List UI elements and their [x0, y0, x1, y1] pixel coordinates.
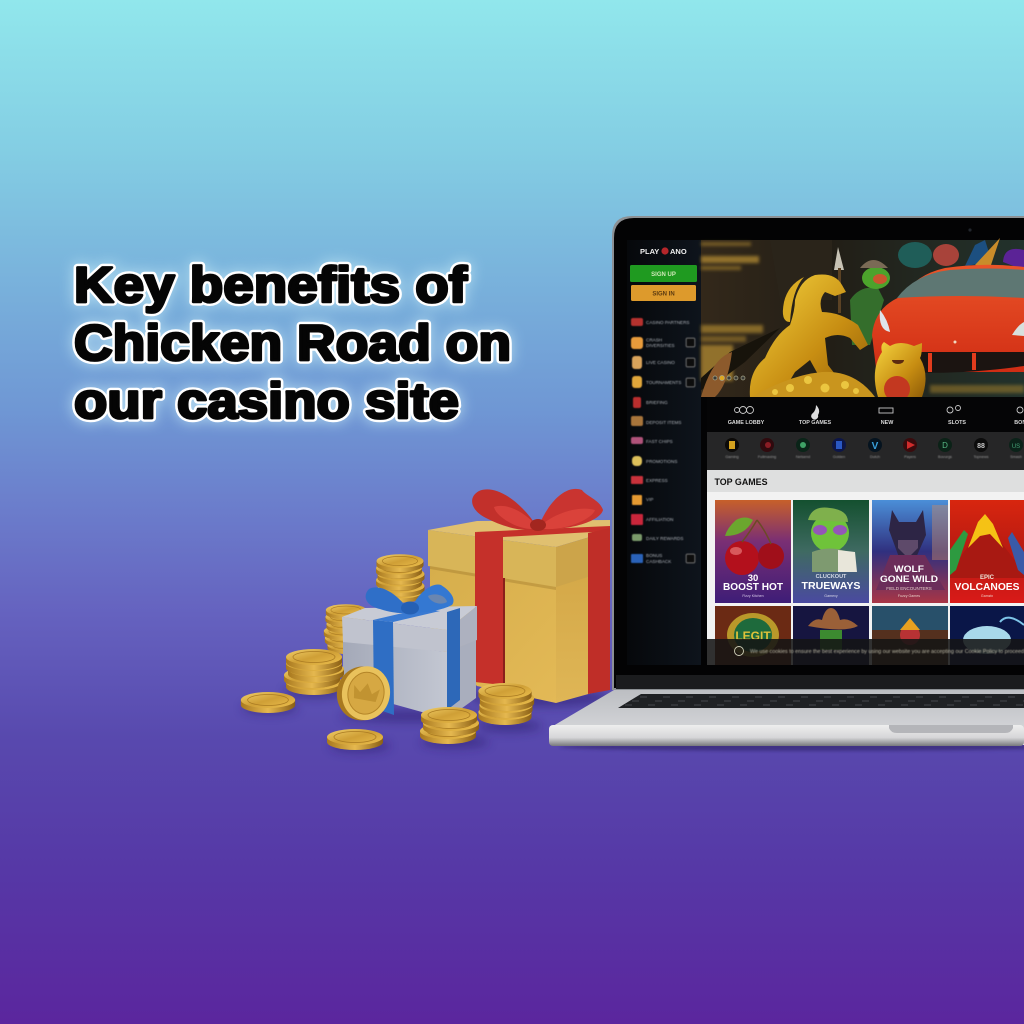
category nav [707, 397, 1024, 432]
game card: Trueways: CLUCKOUT [816, 574, 847, 580]
title: our casino site [74, 373, 459, 429]
trackpad notch [889, 725, 1013, 733]
logo: PLAY [640, 247, 659, 256]
title: Key benefits of [74, 257, 467, 313]
blue ribbon [373, 620, 394, 715]
menu items: CRASH [646, 338, 662, 342]
game card: Boost Hot: BOOST HOT [723, 582, 783, 593]
gold scatter [701, 242, 1024, 393]
blue bow [366, 587, 410, 613]
menu items: DAILY REWARDS [646, 536, 683, 541]
game card: Boost Hot: 30 [748, 573, 758, 584]
game card: Wolf Gone Wild: GONE WILD [880, 574, 938, 585]
category nav: SLOTS [948, 420, 966, 426]
provider icons row: Fullmaxing [758, 455, 776, 459]
coin stack: left [284, 649, 344, 695]
game cards: second row: LEGIT [735, 629, 771, 643]
ground shadows [242, 686, 610, 752]
notice bar: We use cookies to ensure the best experience by using our website you are accepting our Cookie Policy to proceed [750, 649, 1024, 655]
sign up button: SIGN UP [651, 272, 676, 278]
game card: Volcanoes [950, 500, 1024, 603]
menu items: DIVERSITIES [646, 343, 675, 348]
menu items: VIP [646, 497, 653, 502]
title: Chicken Road on [74, 315, 511, 371]
red ribbon [475, 532, 503, 685]
coin stack: front centre [420, 707, 479, 744]
sidebar [627, 240, 701, 665]
provider icons row: D [942, 441, 948, 450]
menu items: CASHBACK [646, 559, 672, 564]
menu items: LIVE CASINO [646, 360, 675, 365]
game cards: second row [715, 606, 1024, 665]
game card: Trueways [793, 500, 869, 603]
notice bar [707, 639, 1024, 665]
provider icons row [707, 432, 1024, 470]
title: Chicken Road on [74, 315, 511, 371]
laptop base [549, 690, 1024, 751]
provider icons row: Topnews [974, 455, 989, 459]
game card: Boost Hot [715, 500, 791, 603]
coin stack: front right [478, 683, 534, 725]
provider icons row: Dutch [870, 455, 880, 459]
coin stack: behind silver box, top [376, 554, 425, 603]
provider icons row: US [1012, 444, 1020, 450]
golden horse [750, 274, 868, 397]
provider icons row: V [872, 441, 879, 452]
title: our casino site [74, 373, 459, 429]
sign up button [630, 265, 697, 282]
upright crown coin [333, 662, 394, 725]
laptop [549, 216, 1024, 751]
menu items: AFFILIATION [646, 517, 673, 522]
carousel dots [713, 376, 745, 380]
menu items: EXPRESS [646, 478, 668, 483]
game card: Wolf Gone Wild: Fuzzy Games [898, 594, 920, 598]
game card: Trueways: Gamevy [824, 594, 838, 598]
provider icons row: Smash [1010, 455, 1022, 459]
provider icons row: Bovurgs [938, 455, 952, 459]
laptop lid [612, 216, 1024, 690]
coin stack: behind silver box, left [324, 604, 367, 654]
category nav: TOP GAMES [799, 420, 831, 426]
game card: Volcanoes: Gamzix [981, 594, 993, 598]
menu items: DEPOSIT ITEMS [646, 420, 681, 425]
game card: Wolf Gone Wild: FIELD ENCOUNTERS [886, 586, 932, 591]
lid [428, 520, 610, 547]
title: our casino site [74, 373, 459, 429]
menu items: PROMOTIONS [646, 459, 677, 464]
title [74, 257, 511, 429]
goblin character [834, 247, 890, 345]
sign in button: SIGN IN [652, 292, 675, 298]
title: Chicken Road on [74, 315, 511, 371]
game card: Boost Hot: Fizzy Kitchen [742, 594, 764, 598]
body [430, 565, 556, 703]
logo [640, 247, 687, 256]
red bow [472, 489, 538, 530]
gold pile [752, 372, 875, 397]
keyboard [618, 694, 1024, 708]
category nav: NEW [881, 420, 894, 426]
category nav: GAME LOBBY [728, 420, 765, 426]
title: Key benefits of [74, 257, 467, 313]
loose coin: front [327, 729, 383, 750]
menu items: FAST CHIPS [646, 439, 673, 444]
hero banner [701, 238, 1024, 402]
logo: ANO [670, 247, 687, 256]
gifts and coins illustration [241, 489, 610, 752]
menu items: TOURNAMENTS [646, 380, 681, 385]
game card: Wolf Gone Wild [872, 500, 948, 603]
provider icons row: Netsend [796, 455, 810, 459]
menu items [631, 318, 695, 564]
gold gift box [428, 489, 610, 703]
loose coin: far left [241, 692, 295, 713]
menu items: BONUS [646, 553, 662, 558]
sign in button [631, 285, 696, 301]
provider icons row: Payers [904, 455, 916, 459]
screen [627, 238, 1024, 665]
silver gift box [342, 585, 477, 719]
game card: Trueways: TRUEWAYS [802, 580, 860, 592]
golden bear [875, 342, 926, 402]
creature backdrop [898, 238, 1024, 270]
top games section: TOP GAMES [714, 477, 768, 488]
red sports car [872, 265, 1024, 374]
provider icons row: Golden [833, 455, 845, 459]
menu items: CASINO PARTNERS [646, 320, 689, 325]
menu items: BRIEFING [646, 400, 668, 405]
title: Key benefits of [74, 257, 467, 313]
provider icons row: Gaming [725, 455, 739, 459]
provider icons row: 88 [977, 443, 985, 450]
game card: Volcanoes: EPIC [980, 575, 995, 581]
top games section [707, 470, 1024, 665]
game card: Wolf Gone Wild: WOLF [894, 564, 925, 574]
game card: Volcanoes: VOLCANOES [954, 581, 1020, 593]
